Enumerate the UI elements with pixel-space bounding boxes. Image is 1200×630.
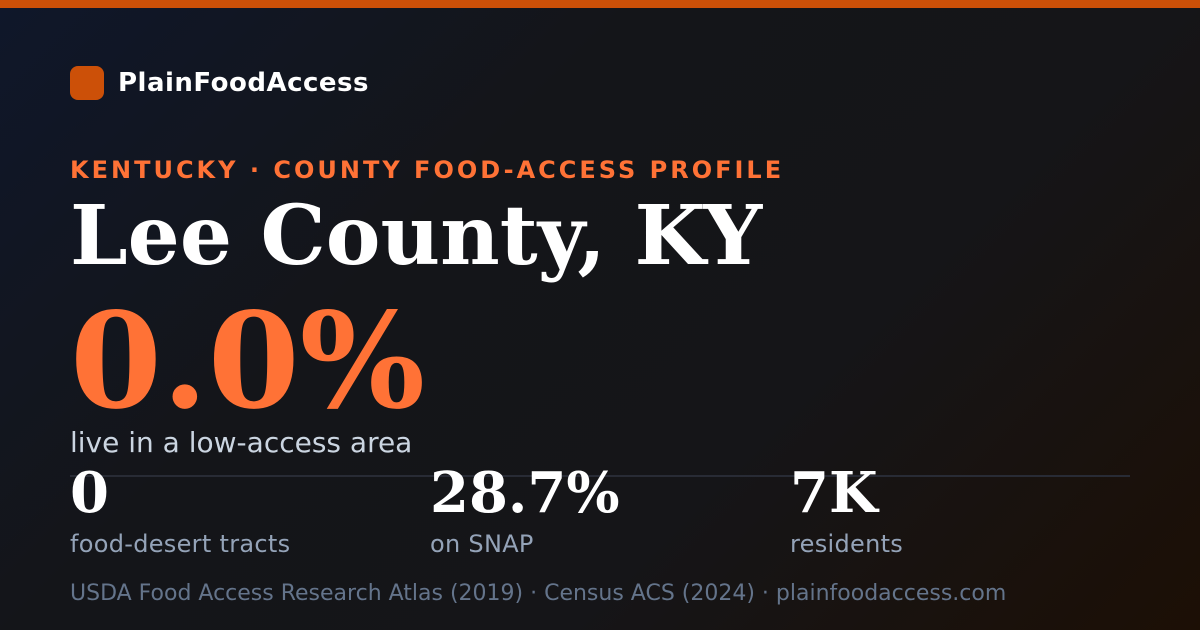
- source footer: USDA Food Access Research Atlas (2019) · Census ACS (2024) · plainfoodaccess.com: [70, 581, 1006, 606]
- divider: [70, 475, 1130, 477]
- stat value: 28.7%: [430, 460, 620, 526]
- stat value: 0: [70, 460, 109, 526]
- stat label: residents: [790, 530, 903, 558]
- logo icon: [70, 66, 104, 100]
- eyebrow heading: KENTUCKY · COUNTY FOOD-ACCESS PROFILE: [70, 156, 784, 184]
- stat: food-desert tracts: [70, 460, 290, 558]
- brand name: PlainFoodAccess: [118, 68, 369, 98]
- title: Lee County, KY: [70, 188, 762, 284]
- stat: residents: [790, 460, 903, 558]
- stat label: on SNAP: [430, 530, 534, 558]
- stat: on SNAP: [430, 460, 620, 558]
- stat value: 7K: [790, 460, 878, 526]
- top accent bar: [0, 0, 1200, 8]
- stat label: food-desert tracts: [70, 530, 290, 558]
- headline statistic label: live in a low-access area: [70, 426, 412, 459]
- headline statistic: 0.0%: [70, 284, 425, 439]
